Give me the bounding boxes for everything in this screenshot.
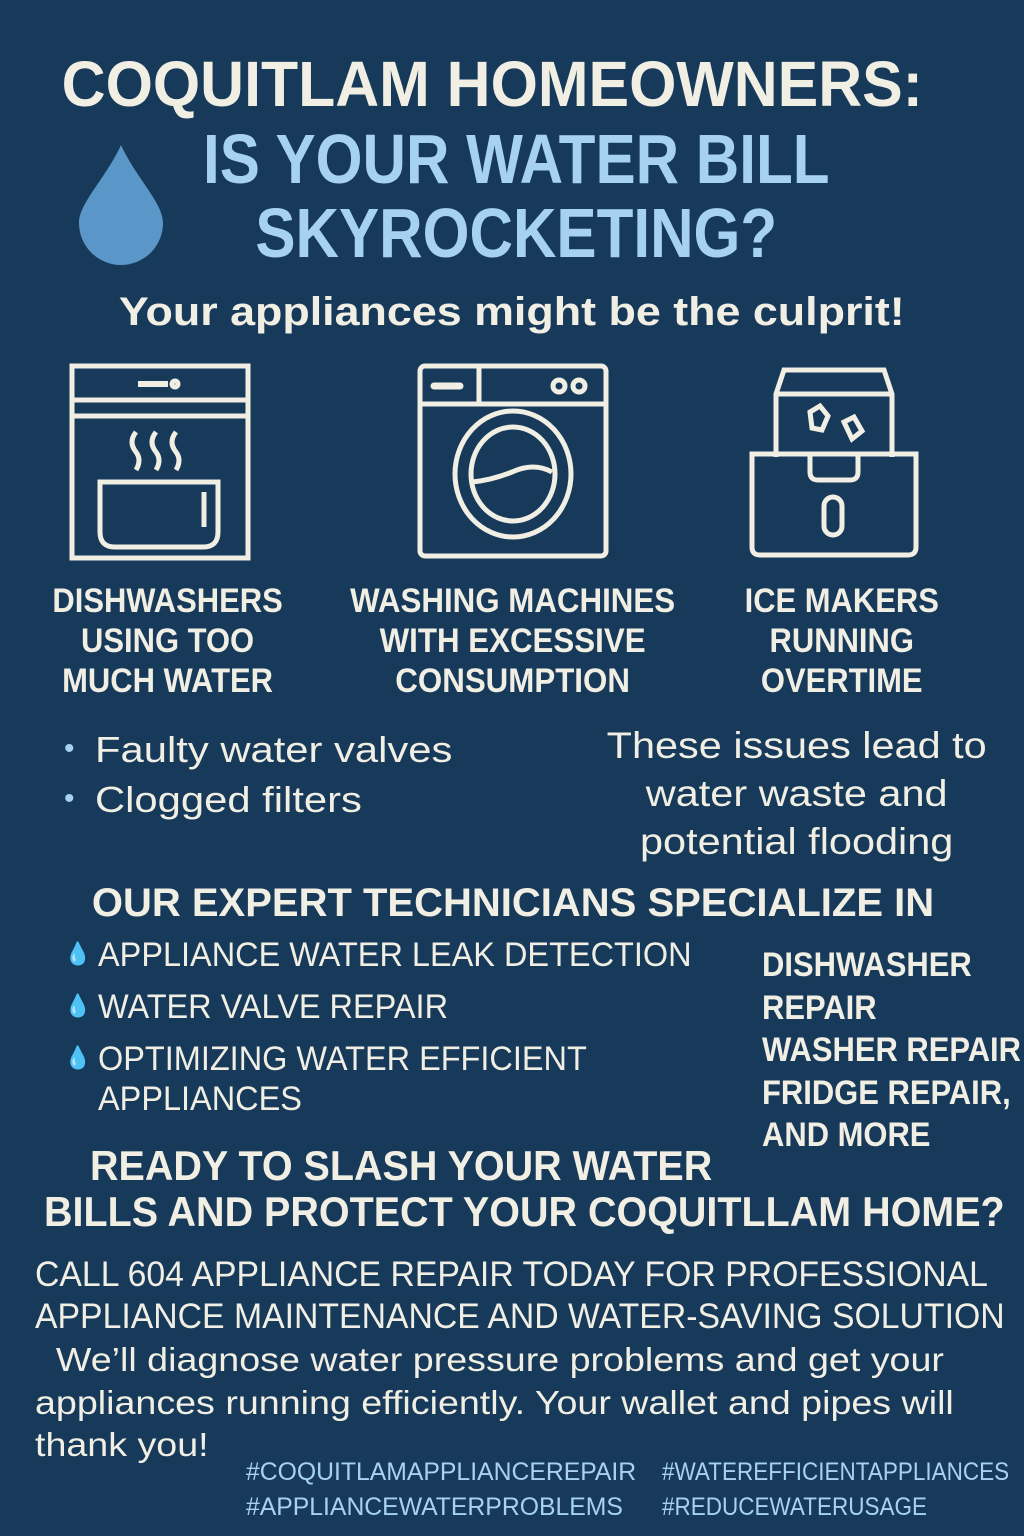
hashtags right — [662, 1458, 1009, 1521]
list: repairs: DISHWASHER — [762, 946, 972, 984]
bullet list: problems: Faulty water valves — [95, 729, 452, 770]
bullet list: problems — [64, 729, 452, 820]
label: ice makers: RUNNING — [770, 622, 914, 660]
text: call: APPLIANCE MAINTENANCE AND WATER-SAVING SOLUTION — [35, 1297, 1005, 1336]
heading: call to action — [44, 1142, 1005, 1235]
text: paragraph: We’ll diagnose water pressure problems and get your — [56, 1341, 944, 1378]
list: repairs: FRIDGE REPAIR, — [762, 1074, 1011, 1112]
hashtags — [246, 1458, 636, 1521]
hashtags: #APPLIANCEWATERPROBLEMS — [246, 1493, 623, 1521]
list: services: OPTIMIZING WATER EFFICIENT — [98, 1040, 587, 1078]
subtitle question — [203, 120, 829, 272]
bullet list: problems: • — [64, 732, 75, 765]
list: services: 💧 — [64, 1045, 91, 1070]
text: paragraph: appliances running efficiently. Your wallet and pipes will — [35, 1384, 954, 1420]
label: dishwashers: MUCH WATER — [63, 662, 273, 700]
list: repairs: AND MORE — [762, 1116, 930, 1154]
text: consequences: water waste and — [646, 773, 948, 814]
icon: water drop — [78, 145, 163, 265]
list: services: APPLIANCE WATER LEAK DETECTION — [98, 936, 692, 974]
label: washing machines: CONSUMPTION — [396, 662, 630, 700]
list: repairs: WASHER REPAIR — [762, 1031, 1021, 1069]
label: washing machines — [350, 582, 675, 700]
label: dishwashers: USING TOO — [81, 622, 255, 660]
heading: call to action: BILLS AND PROTECT YOUR COQUITLLAM HOME? — [44, 1188, 1005, 1235]
list: repairs: REPAIR — [762, 988, 877, 1026]
text: consequences: These issues lead to — [607, 725, 987, 766]
bullet list: problems: • — [64, 782, 75, 815]
label: washing machines: WASHING MACHINES — [351, 582, 675, 620]
subtitle question: SKYROCKETING? — [255, 194, 777, 272]
label: ice makers — [745, 582, 939, 700]
text: paragraph — [35, 1341, 954, 1463]
icon: washing machine — [418, 364, 608, 558]
heading: call to action: READY TO SLASH YOUR WATER — [90, 1142, 712, 1189]
tagline: Your appliances might be the culprit! — [119, 290, 905, 334]
list: services: APPLIANCES — [98, 1080, 302, 1118]
list: repairs — [762, 946, 1021, 1154]
label: dishwashers: DISHWASHERS — [53, 582, 283, 620]
text: consequences: potential flooding — [640, 821, 954, 862]
label: washing machines: WITH EXCESSIVE — [380, 622, 646, 660]
text: paragraph: thank you! — [35, 1426, 209, 1463]
label: ice makers: OVERTIME — [761, 662, 923, 700]
title: COQUITLAM HOMEOWNERS: — [61, 48, 923, 120]
list: services: WATER VALVE REPAIR — [98, 988, 448, 1026]
hashtags: #COQUITLAMAPPLIANCEREPAIR — [246, 1458, 636, 1486]
label: dishwashers — [53, 582, 283, 700]
bullet list: problems: Clogged filters — [95, 779, 361, 820]
label: ice makers: ICE MAKERS — [745, 582, 939, 620]
icon: ice maker — [750, 368, 918, 558]
list: services: 💧 — [64, 941, 91, 966]
heading: specialize: OUR EXPERT TECHNICIANS SPECIALIZE IN — [92, 881, 934, 925]
hashtags right: #REDUCEWATERUSAGE — [662, 1493, 927, 1521]
icon: dishwasher — [70, 364, 250, 560]
list: services — [64, 936, 692, 1118]
text: consequences — [607, 725, 987, 862]
subtitle question: IS YOUR WATER BILL — [203, 120, 829, 198]
list: services: 💧 — [64, 993, 91, 1018]
hashtags right: #WATEREFFICIENTAPPLIANCES — [662, 1458, 1009, 1486]
text: call: CALL 604 APPLIANCE REPAIR TODAY FOR PROFESSIONAL — [35, 1255, 988, 1294]
text: call — [35, 1255, 1005, 1336]
